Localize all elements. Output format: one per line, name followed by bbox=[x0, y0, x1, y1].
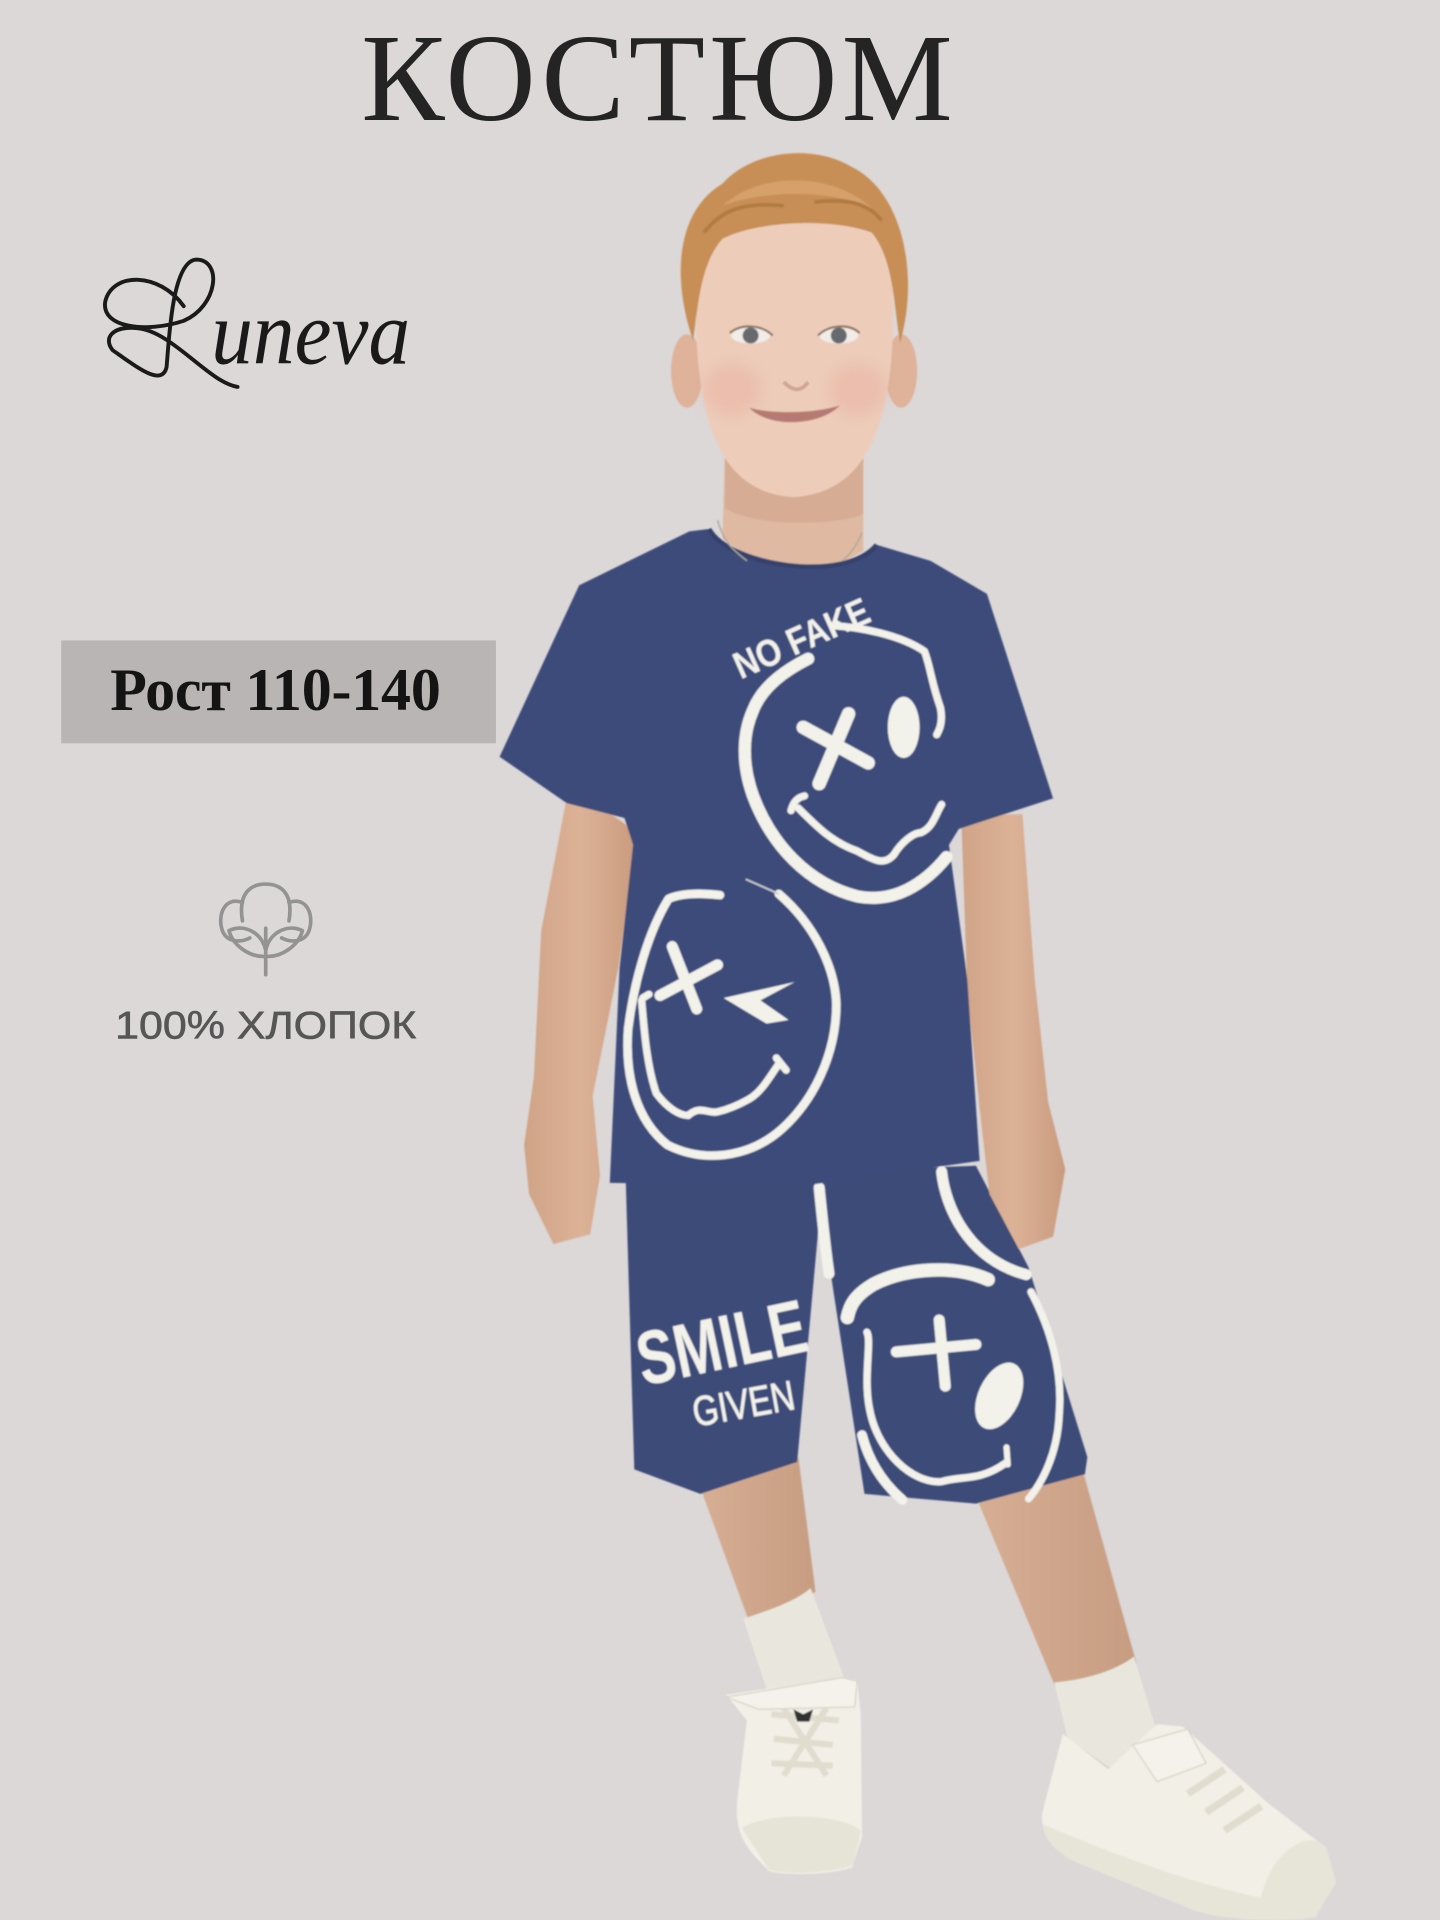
shorts print: SMILE GIVEN: SMILE bbox=[629, 1284, 815, 1403]
neck bbox=[722, 453, 863, 588]
shorts bbox=[626, 1166, 1087, 1504]
hair bbox=[681, 153, 908, 343]
head bbox=[671, 153, 917, 523]
eyes bbox=[730, 326, 860, 343]
nose bbox=[784, 382, 808, 389]
left shoe bbox=[726, 1678, 862, 1874]
chin shadow bbox=[725, 456, 863, 523]
shirt print: NO FAKE: NO FAKE bbox=[727, 591, 876, 688]
title: КОСТЮМ bbox=[361, 10, 953, 148]
t-shirt bbox=[500, 520, 1053, 1185]
ears bbox=[671, 334, 917, 408]
shirt print: upper smiley bbox=[745, 626, 947, 898]
right shoe bbox=[1042, 1724, 1336, 1920]
arms and hands bbox=[524, 784, 1065, 1249]
size panel bbox=[61, 640, 496, 743]
necklace bbox=[718, 520, 862, 561]
socks bbox=[743, 1588, 1157, 1772]
legs bbox=[700, 1457, 1136, 1687]
shorts print: waist stripe and upper smile arc bbox=[819, 1172, 1026, 1275]
face bbox=[696, 218, 893, 497]
icon: cotton boll bbox=[221, 884, 311, 975]
shorts print: large smiley bbox=[847, 1270, 1060, 1500]
mouth bbox=[749, 405, 840, 422]
boy figure bbox=[500, 153, 1336, 1920]
shorts print: SMILE GIVEN: GIVEN bbox=[689, 1371, 798, 1436]
size panel: Рост 110-140 bbox=[110, 657, 441, 723]
shorts print: SMILE GIVEN bbox=[629, 1284, 815, 1436]
shirt print: lower smiley bbox=[628, 879, 836, 1156]
cotton label: 100% ХЛОПОК bbox=[115, 1004, 417, 1047]
logo: Luneva bbox=[105, 260, 410, 387]
